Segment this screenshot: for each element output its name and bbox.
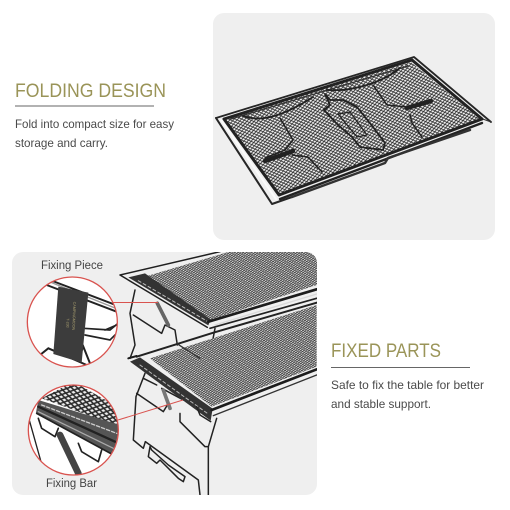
label: fixing bar: Fixing Bar (46, 478, 97, 490)
upper legs and wires (130, 290, 135, 358)
folded table (216, 57, 491, 204)
callout: fixing piece: CAMPINGMOON (71, 302, 76, 331)
upper shelf (145, 250, 327, 320)
lower rails (280, 123, 482, 199)
panel: fixed parts photo (12, 250, 327, 495)
text: fixed parts description (331, 378, 484, 411)
stacked table (120, 250, 327, 495)
label: fixing piece: Fixing Piece (41, 260, 103, 272)
text: fixed parts description: and stable support. (331, 397, 431, 411)
text: folding description (15, 117, 174, 150)
callout: fixing piece: T-230 (65, 318, 70, 328)
callout: fixing bar (28, 382, 123, 475)
lower shelf (150, 305, 317, 407)
heading: fixed parts: FIXED PARTS (331, 341, 441, 362)
inner frame (224, 60, 482, 195)
callout: fixing piece (27, 277, 120, 367)
lower legs and wires (133, 373, 200, 495)
mesh (225, 62, 481, 194)
panel: folded table photo (213, 13, 495, 240)
text: folding description: storage and carry. (15, 136, 108, 150)
outer frame (216, 57, 491, 122)
heading: folding design: FOLDING DESIGN (15, 81, 166, 102)
mesh tab outlines (243, 97, 313, 119)
leader lines (113, 302, 183, 420)
text: fixed parts description: Safe to fix the table for better (331, 378, 484, 392)
text: folding description: Fold into compact size for easy (15, 117, 174, 131)
